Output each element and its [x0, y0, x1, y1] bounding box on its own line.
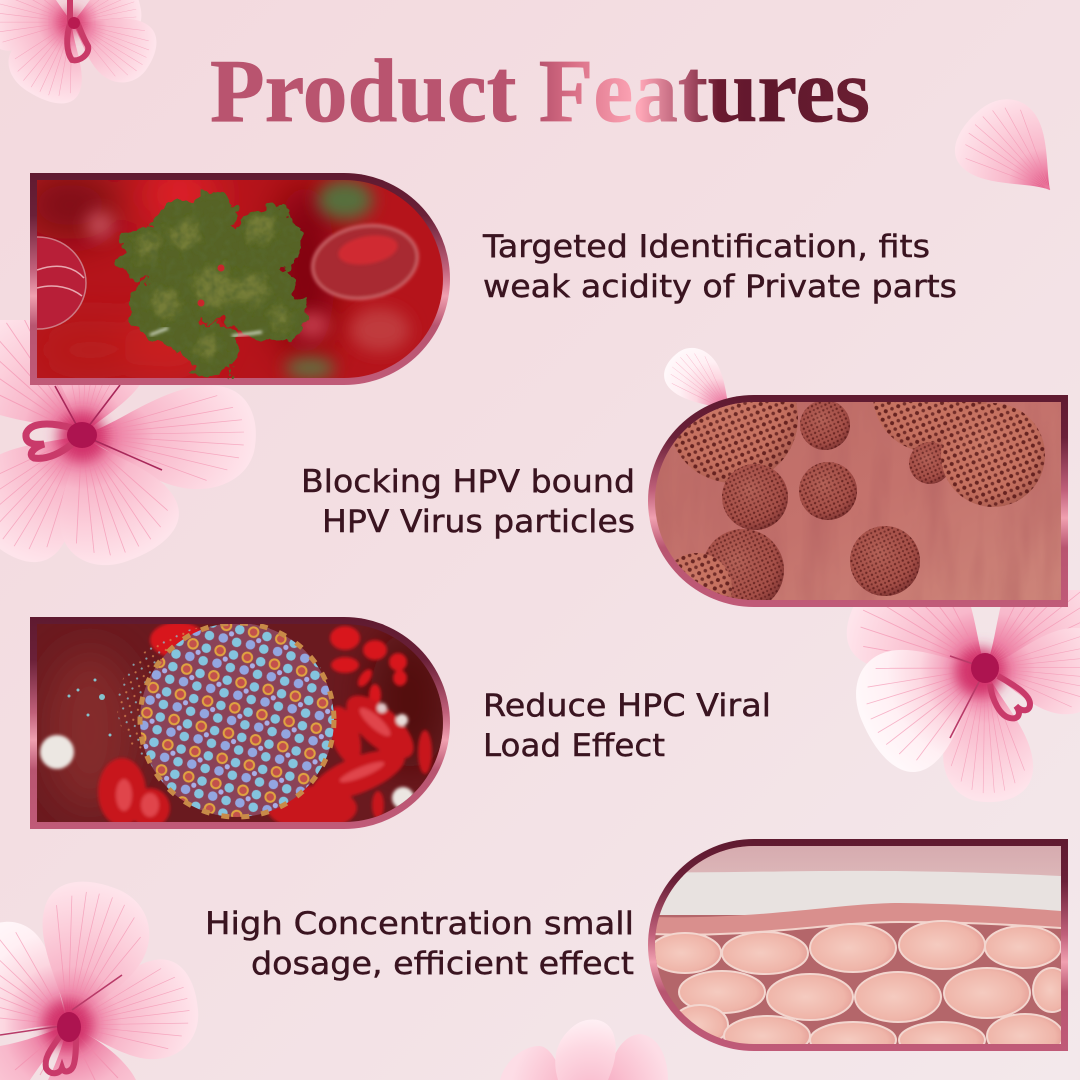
text: feature 3	[483, 688, 771, 764]
panel: targeted identification	[30, 173, 450, 385]
red blood cell right	[309, 222, 421, 302]
cells	[655, 920, 1061, 1044]
icon: flower right	[847, 590, 1080, 802]
title: Product Features	[210, 42, 870, 141]
virus sphere	[140, 623, 334, 817]
text: feature 1	[482, 229, 957, 305]
icon: flower top left	[0, 0, 156, 104]
icon: flower bottom	[500, 1020, 668, 1080]
text: feature 1: weak acidity of Private parts	[483, 269, 957, 305]
text: feature 2: HPV Virus particles	[322, 504, 635, 540]
icon: flower bottom left	[0, 882, 198, 1080]
icon: petal above panel 2	[664, 348, 728, 406]
green virus blob	[120, 190, 307, 377]
icon: petal top right	[955, 100, 1050, 190]
red blood cell left	[37, 236, 87, 330]
blood cells	[40, 622, 432, 830]
icon: flower left	[0, 320, 256, 565]
text: feature 3: Reduce HPC Viral	[483, 688, 771, 724]
panel: high concentration	[648, 839, 1071, 1058]
text: feature 2: Blocking HPV bound	[301, 464, 635, 500]
text: feature 2	[301, 464, 635, 540]
text: feature 4: dosage, efficient effect	[251, 946, 634, 982]
text: feature 3: Load Effect	[483, 728, 665, 764]
text: feature 4	[205, 906, 634, 982]
blob details	[150, 264, 262, 336]
panel: blocking HPV	[648, 395, 1068, 607]
speckles	[117, 625, 326, 755]
spheres	[674, 402, 1045, 600]
panel: reduce viral load	[30, 617, 450, 830]
text: feature 4: High Concentration small	[205, 906, 634, 942]
text: feature 1: Targeted Identification, fits	[482, 229, 930, 265]
